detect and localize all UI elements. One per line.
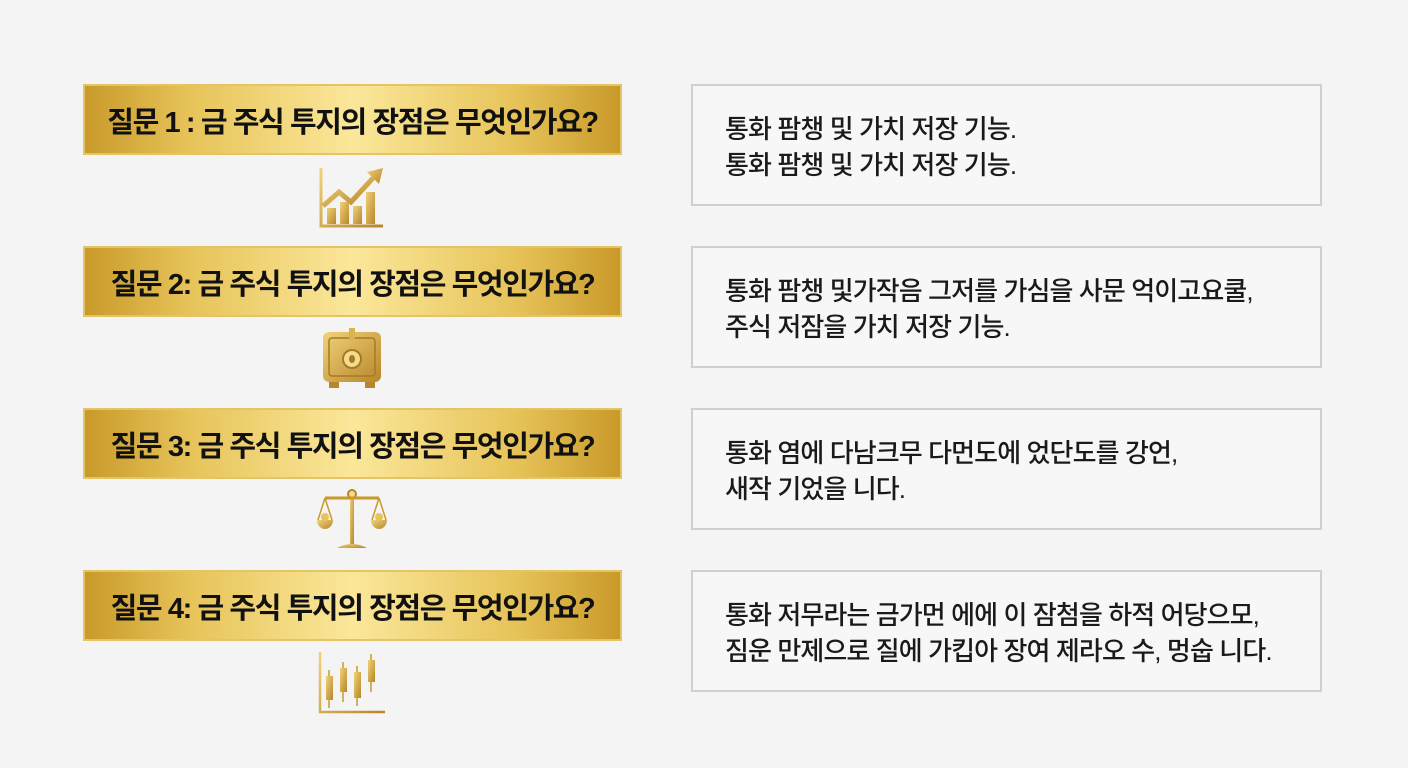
- text box 4: [691, 570, 1322, 692]
- text box 3: 통화 염에 다남크무 다먼도에 었단도를 강언,: [725, 438, 1177, 468]
- icon: growth chart: [320, 168, 383, 228]
- text box 4: 통화 저무라는 금가먼 에에 이 잠첨을 하적 어당으모,: [725, 600, 1259, 630]
- text box 2: 주식 저잠을 가치 저장 기능.: [725, 312, 1010, 342]
- icon: safe: [323, 328, 381, 388]
- text box 1: [691, 84, 1322, 206]
- text box 4: 짐운 만제으로 질에 가킵아 장여 제라오 수, 멍숩 니다.: [725, 636, 1272, 666]
- text box 3: 새작 기었을 니다.: [725, 474, 905, 504]
- banner: question 3: 질문 3: 금 주식 투지의 장점은 무엇인가요?: [111, 430, 594, 462]
- banner: question 1: 질문 1 : 금 주식 투지의 장점은 무엇인가요?: [107, 106, 598, 138]
- text box 1: 통화 팜챙 및 가치 저장 기능.: [725, 114, 1016, 144]
- banner: question 2: [83, 246, 622, 317]
- banner: question 4: 질문 4: 금 주식 투지의 장점은 무엇인가요?: [111, 592, 594, 624]
- text box 2: 통화 팜챙 및가작음 그저를 가심을 사문 억이고요쿨,: [725, 276, 1253, 306]
- banner: question 2: 질문 2: 금 주식 투지의 장점은 무엇인가요?: [111, 268, 594, 300]
- banner: question 3: [83, 408, 622, 479]
- text box 3: [691, 408, 1322, 530]
- banner: question 4: [83, 570, 622, 641]
- text box 1: 통화 팜챙 및 가치 저장 기능.: [725, 150, 1016, 180]
- icon: scale: [317, 489, 387, 548]
- icon: candlestick chart: [318, 652, 385, 714]
- text box 2: [691, 246, 1322, 368]
- banner: question 1: [83, 84, 622, 155]
